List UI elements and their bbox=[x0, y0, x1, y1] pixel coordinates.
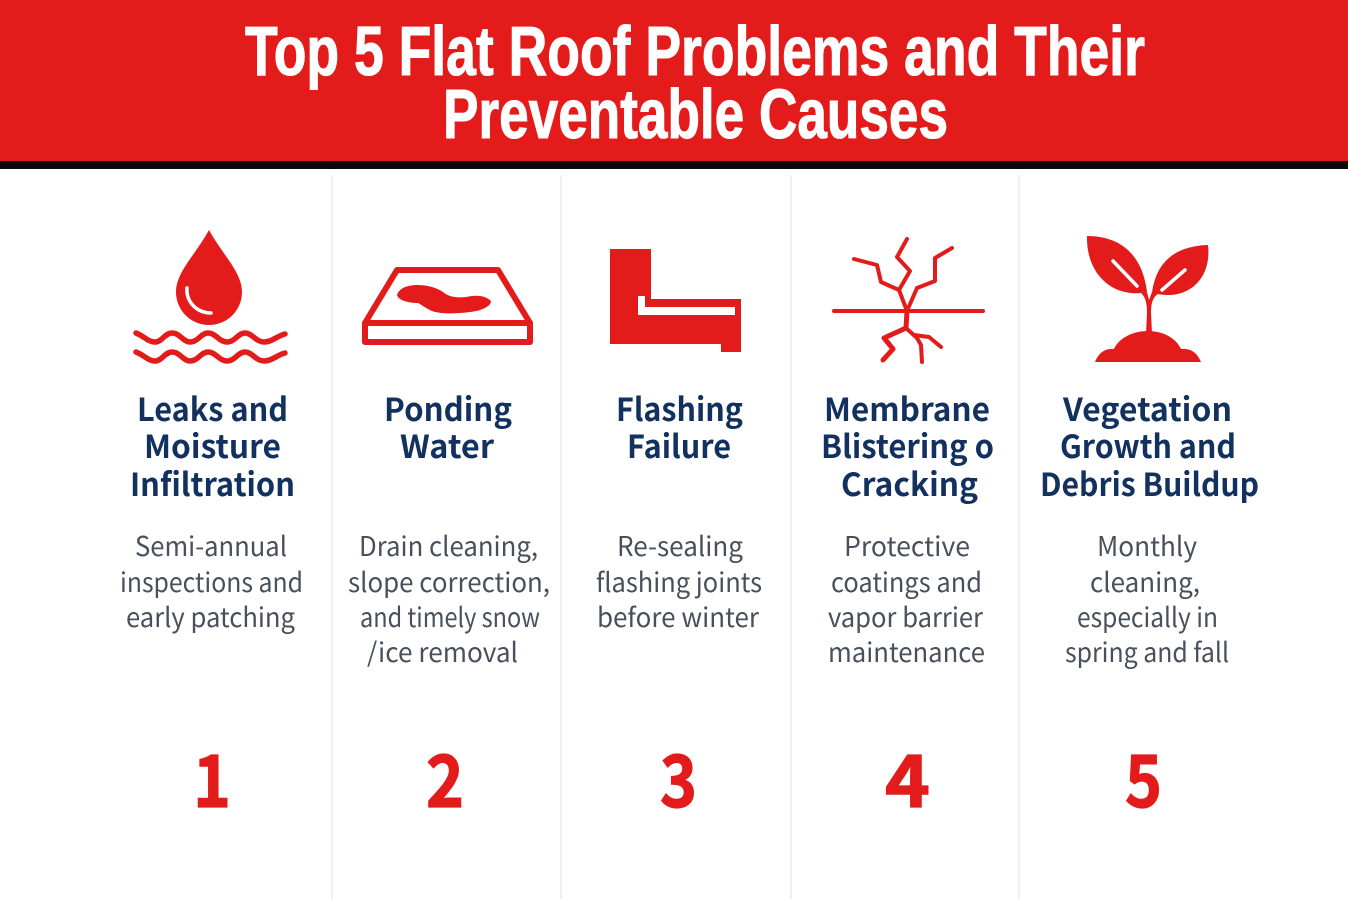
icon: sprout bbox=[1087, 236, 1208, 362]
heading: ponding: Water bbox=[400, 422, 494, 468]
panel: ponding water bbox=[348, 270, 550, 828]
heading: ponding: Ponding bbox=[384, 385, 512, 431]
heading: ponding bbox=[384, 385, 512, 468]
text: leaks prevention: Semi-annual bbox=[135, 525, 287, 564]
heading: vegetation: Growth and bbox=[1060, 422, 1236, 468]
heading: membrane bbox=[821, 385, 994, 506]
text: ponding prevention: /ice removal bbox=[367, 631, 518, 670]
icon: membrane crack bbox=[834, 239, 983, 362]
heading: vegetation bbox=[1040, 385, 1259, 506]
text: vegetation prevention: spring and fall bbox=[1065, 631, 1229, 670]
text: leaks prevention: inspections and bbox=[120, 561, 303, 600]
icon: flat roof with puddle bbox=[365, 270, 530, 342]
heading: membrane: Membrane bbox=[824, 385, 990, 431]
text: ponding prevention: and timely snow bbox=[360, 596, 540, 635]
text: vegetation prevention: cleaning, bbox=[1090, 561, 1200, 600]
panel: membrane blistering or cracking bbox=[821, 239, 994, 828]
header banner bbox=[0, 0, 1348, 169]
number 1: 1 bbox=[193, 723, 231, 828]
text: flashing prevention: Re-sealing bbox=[617, 525, 743, 564]
text: ponding prevention bbox=[348, 525, 550, 670]
icon: water drop over waves bbox=[136, 230, 285, 361]
text: leaks prevention: early patching bbox=[126, 596, 295, 635]
text: membrane prevention bbox=[828, 525, 985, 670]
heading: flashing: Failure bbox=[627, 422, 731, 468]
number 5: 5 bbox=[1125, 723, 1162, 828]
text: membrane prevention: coatings and bbox=[831, 561, 982, 600]
heading: vegetation: Debris Buildup bbox=[1040, 460, 1259, 506]
text: flashing prevention: before winter bbox=[597, 596, 759, 635]
heading: leaks: Moisture bbox=[144, 422, 281, 468]
heading: leaks: Leaks and bbox=[137, 385, 288, 431]
text: flashing prevention bbox=[596, 525, 762, 635]
heading: leaks: Infiltration bbox=[130, 460, 295, 506]
text: vegetation prevention bbox=[1065, 525, 1229, 670]
text: vegetation prevention: Monthly bbox=[1097, 525, 1197, 564]
number 2: 2 bbox=[426, 723, 464, 828]
heading: flashing bbox=[616, 385, 743, 468]
heading: leaks bbox=[130, 385, 295, 506]
heading: membrane: Cracking bbox=[841, 460, 978, 506]
text: membrane prevention: maintenance bbox=[828, 631, 985, 670]
panel: flashing failure bbox=[596, 249, 762, 828]
text: membrane prevention: vapor barrier bbox=[828, 596, 983, 635]
text: vegetation prevention: especially in bbox=[1077, 596, 1218, 635]
heading: flashing: Flashing bbox=[616, 385, 743, 431]
text: ponding prevention: slope correction, bbox=[348, 561, 550, 600]
panel: leaks and moisture infiltration bbox=[120, 230, 303, 828]
heading: vegetation: Vegetation bbox=[1062, 385, 1232, 431]
title: Preventable Causes bbox=[443, 75, 948, 153]
title bbox=[245, 12, 1145, 153]
text: membrane prevention: Protective bbox=[844, 525, 970, 564]
panel: vegetation growth and debris buildup bbox=[1040, 236, 1259, 828]
number 3: 3 bbox=[660, 723, 697, 828]
icon: flashing profile bbox=[610, 249, 741, 352]
number 4: 4 bbox=[885, 723, 930, 828]
text: flashing prevention: flashing joints bbox=[596, 561, 762, 600]
text: ponding prevention: Drain cleaning, bbox=[359, 525, 538, 564]
text: leaks prevention bbox=[120, 525, 303, 635]
heading: membrane: Blistering o bbox=[821, 422, 994, 468]
